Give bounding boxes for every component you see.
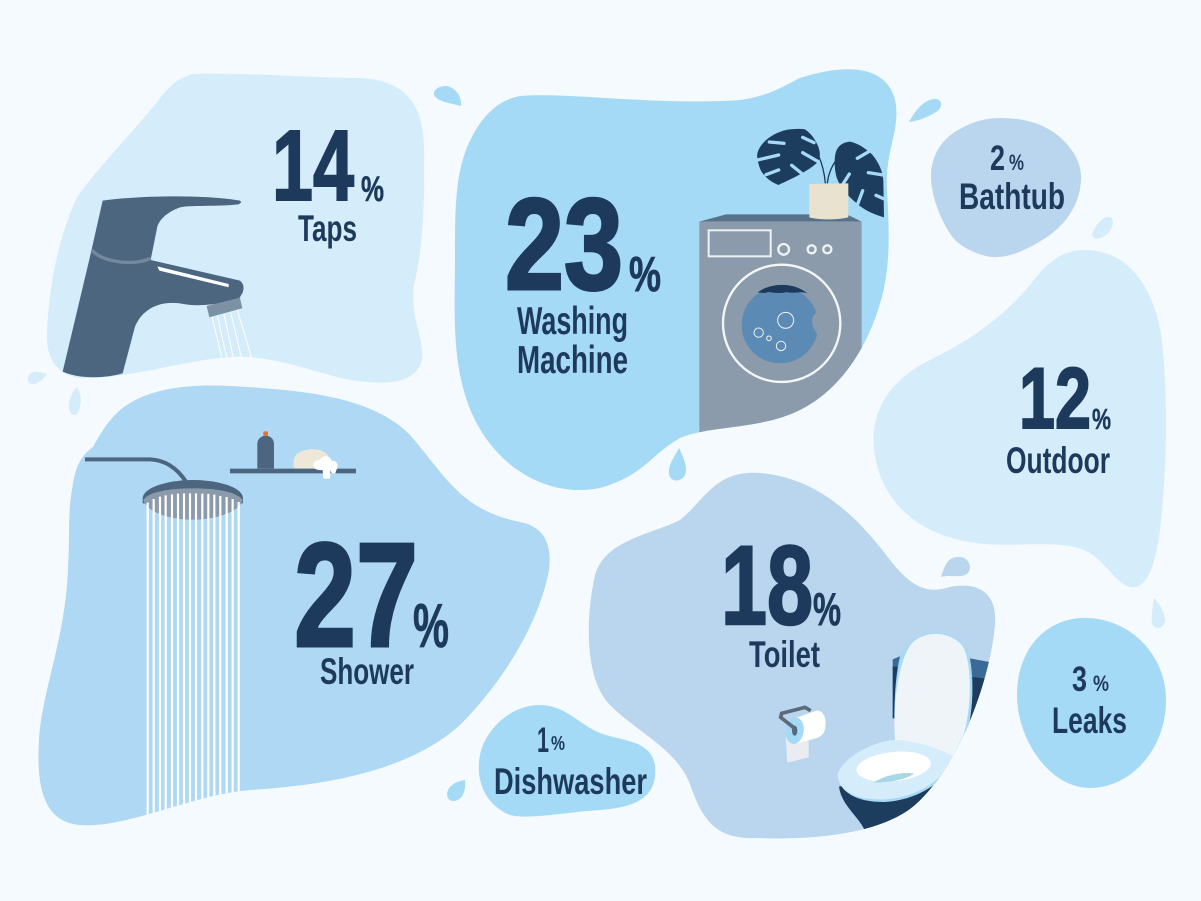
value: 18% Toilet: Toilet <box>749 634 820 675</box>
panel: taps <box>47 74 424 383</box>
value: 1% Dishwasher: 1 <box>537 721 549 760</box>
value: 18% Toilet: 18 <box>721 523 813 648</box>
icon: washing machine and plant <box>699 129 884 443</box>
panel: bathtub <box>931 118 1081 257</box>
value: 3% Leaks: % <box>1093 671 1109 696</box>
panel: toilet <box>589 473 997 838</box>
value: 14% Taps: Taps <box>298 208 357 249</box>
value: 12% Outdoor: Outdoor <box>1006 440 1110 481</box>
value: 2% Bathtub <box>959 139 1065 217</box>
value: 23% Washing Machine: Washing <box>517 300 628 343</box>
value: 27% Shower: % <box>413 592 449 661</box>
value: 2% Bathtub: Bathtub <box>959 176 1065 217</box>
value: 23% Washing Machine <box>505 171 661 382</box>
icon: tap <box>63 196 252 377</box>
value: 12% Outdoor: 12 <box>1019 351 1091 447</box>
water drops <box>28 86 1165 801</box>
panel: outdoor <box>873 250 1166 587</box>
value: 2% Bathtub: % <box>1009 150 1024 175</box>
value: 2% Bathtub: 2 <box>990 139 1005 178</box>
value: 14% Taps: % <box>361 170 384 209</box>
panel: leaks <box>1017 618 1166 788</box>
value: 3% Leaks: 3 <box>1072 660 1087 699</box>
value: 27% Shower: Shower <box>320 651 414 692</box>
value: 12% Outdoor <box>1006 351 1111 481</box>
panel: dishwasher <box>479 705 655 817</box>
value: 14% Taps: 14 <box>272 110 354 222</box>
panel: shower <box>38 386 550 830</box>
value: 23% Washing Machine: Machine <box>517 339 628 382</box>
icon: toilet paper <box>781 707 826 763</box>
value: 27% Shower: 27 <box>294 513 418 678</box>
value: 12% Outdoor: % <box>1092 404 1111 436</box>
panel: washing machine <box>455 69 896 490</box>
icon: shelf with bottle and soap <box>230 431 356 479</box>
value: 23% Washing Machine: % <box>629 248 661 302</box>
icon: shower head and water <box>85 459 243 830</box>
value: 23% Washing Machine: 23 <box>505 171 623 317</box>
value: 3% Leaks: Leaks <box>1052 700 1127 741</box>
value: 3% Leaks <box>1052 660 1127 741</box>
value: 18% Toilet: % <box>813 583 841 635</box>
value: 1% Dishwasher: Dishwasher <box>494 761 647 802</box>
icon: toilet <box>838 633 997 833</box>
value: 1% Dishwasher <box>494 721 647 802</box>
value: 1% Dishwasher: % <box>551 733 565 755</box>
